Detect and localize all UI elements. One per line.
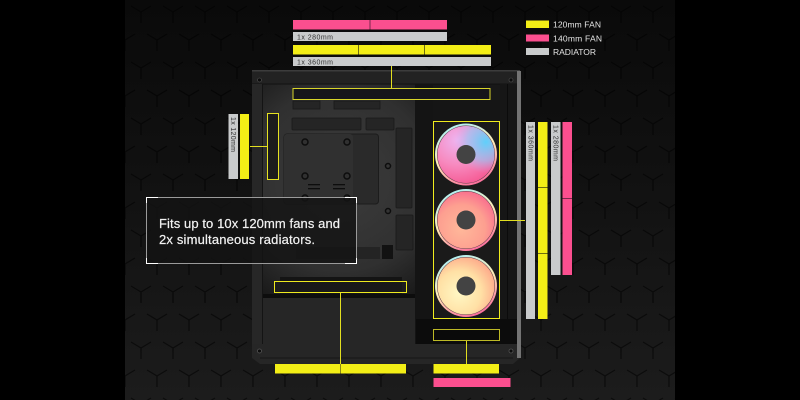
right 120mm fan bar [538, 122, 548, 319]
mount holes [302, 139, 390, 214]
callout: 2x simultaneous radiators. [159, 232, 315, 247]
bottom 120mm fan bar [275, 364, 406, 374]
bottom right 120mm fan bar [434, 364, 499, 374]
top 120mm fan bar [293, 45, 491, 54]
top vents [292, 101, 413, 250]
top fan zone outline [293, 88, 490, 100]
side 120mm fan bar [240, 114, 249, 179]
motherboard tray [263, 84, 415, 296]
case body [252, 70, 520, 358]
fan 2 [435, 189, 497, 251]
legend [526, 20, 602, 57]
fan 1 [435, 124, 497, 186]
right fan zone outline [434, 122, 500, 318]
callout [146, 198, 356, 264]
legend: 120mm fan: 120mm FAN [553, 20, 601, 30]
fan cluster [434, 122, 499, 319]
right 360mm radiator bar [526, 122, 535, 319]
corner screws [258, 349, 513, 353]
right 280mm radiator bar [551, 122, 560, 275]
top 360mm radiator bar [293, 57, 491, 66]
right 280mm radiator bar: 1x 280mm [552, 125, 558, 161]
top panel ports [258, 78, 513, 82]
left wall [252, 84, 263, 346]
top 360mm radiator bar: 1x 360mm [297, 60, 333, 66]
legend: radiator: RADIATOR [553, 47, 596, 57]
side fan zone outline [268, 114, 278, 180]
connector lines [250, 66, 525, 364]
legend: 140mm fan: 140mm FAN [553, 34, 602, 44]
top 140mm fan bar [293, 20, 447, 30]
bottom right fan zone outline [434, 330, 500, 340]
right 360mm radiator bar: 1x 360mm [526, 125, 534, 161]
right interior column [415, 84, 433, 346]
CPU cutout [284, 134, 378, 204]
top 280mm radiator bar [293, 32, 447, 42]
side 120mm radiator bar [228, 114, 238, 179]
callout text: Fits up to 10x 120mm fans and [159, 216, 340, 231]
top 280mm radiator bar: 1x 280mm [297, 34, 333, 42]
right pillar [517, 71, 521, 358]
fan 3 [435, 255, 497, 317]
right 140mm fan bar [562, 122, 572, 275]
fan bay lower area [416, 319, 517, 346]
top panel [252, 71, 520, 84]
PC case [252, 70, 521, 364]
bottom fan zone outline [274, 282, 406, 292]
lower cable channel [280, 277, 402, 296]
side 120mm radiator bar: 1x 120mm [229, 117, 236, 152]
PSU shroud [263, 298, 416, 344]
bottom right 140mm fan bar [434, 378, 510, 387]
tray slots [296, 184, 393, 259]
base rail [252, 344, 520, 364]
